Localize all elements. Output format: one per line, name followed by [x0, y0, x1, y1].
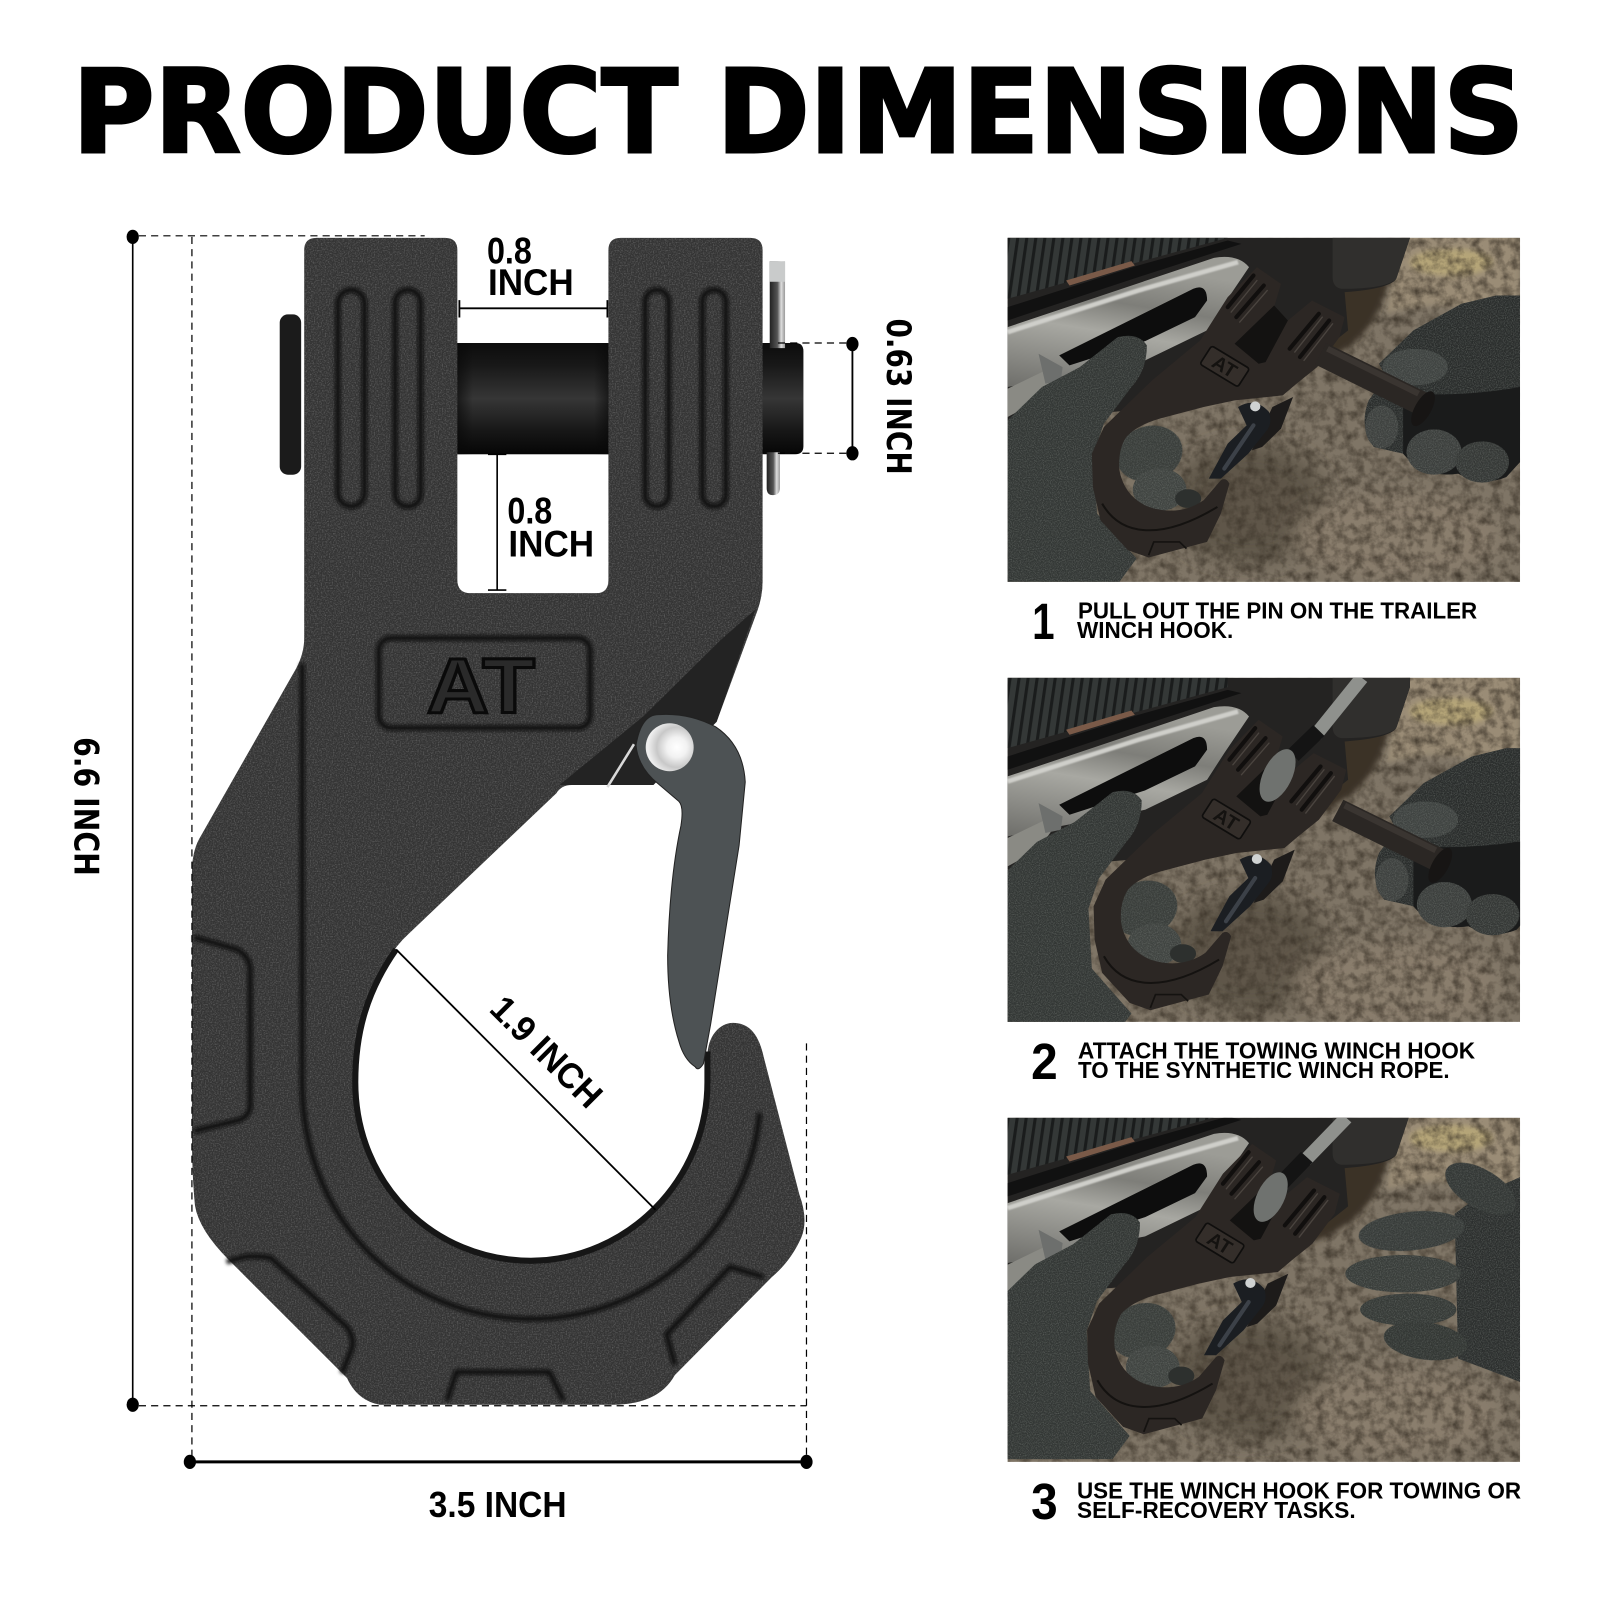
- dimension: slot width 0.8 inch: 0.8: [487, 230, 532, 271]
- dimension: overall height 6.6 inch: [67, 230, 806, 1412]
- dimension: throat 1.9 inch: 1.9 INCH: [482, 988, 610, 1116]
- embossed ridges and recesses: [194, 290, 764, 1401]
- hook body: [192, 238, 805, 1405]
- open right hand: [1345, 1152, 1525, 1382]
- hook product illustration: [192, 238, 805, 1405]
- latch pivot: [646, 723, 694, 771]
- dimension: width 3.5 inch: [184, 237, 813, 1525]
- latch: [636, 714, 745, 1069]
- step 1 caption: WINCH HOOK.: [1077, 617, 1233, 643]
- step 1 caption: [1077, 598, 1477, 643]
- opening inner rim: [355, 949, 707, 1261]
- dimension: slot depth 0.8 inch: 0.8: [507, 491, 552, 532]
- photo 2: attaching rope: [1008, 678, 1520, 1022]
- step 2 caption: [1078, 1038, 1475, 1083]
- dimension: overall height 6.6 inch: 6.6 INCH: [67, 737, 106, 876]
- step 2 caption: ATTACH THE TOWING WINCH HOOK: [1078, 1038, 1475, 1064]
- dimension: slot depth 0.8 inch: [488, 454, 594, 590]
- step 3 caption: SELF-RECOVERY TASKS.: [1077, 1497, 1356, 1523]
- cotter pin: [767, 261, 785, 495]
- lower shaded wedge: [559, 609, 755, 785]
- step 3 number: 3: [1031, 1473, 1058, 1530]
- dimension: slot width 0.8 inch: [459, 230, 607, 317]
- dimension: width 3.5 inch: 3.5 INCH: [429, 1485, 567, 1525]
- brand plate AT: AT: [427, 644, 535, 730]
- dimension: pin diameter 0.63 inch: [778, 319, 918, 475]
- step 2 caption: TO THE SYNTHETIC WINCH ROPE.: [1078, 1057, 1450, 1083]
- dimension: slot width 0.8 inch: INCH: [488, 262, 574, 303]
- photo 3: using the hook: [1008, 1118, 1520, 1462]
- spring wire: [607, 744, 634, 787]
- step 1 number: 1: [1032, 593, 1055, 650]
- cross pin: [449, 343, 803, 454]
- title: PRODUCT DIMENSIONS: [72, 46, 1524, 180]
- dimension: slot depth 0.8 inch: INCH: [508, 523, 594, 564]
- dimension: throat 1.9 inch: [396, 949, 655, 1210]
- step 1 caption: PULL OUT THE PIN ON THE TRAILER: [1078, 598, 1477, 624]
- pin head left: [280, 314, 301, 475]
- step 3 caption: [1077, 1478, 1521, 1523]
- step 2 number: 2: [1031, 1033, 1058, 1090]
- photo 1: pulling out the pin: [1008, 238, 1520, 582]
- step 3 caption: USE THE WINCH HOOK FOR TOWING OR: [1077, 1478, 1521, 1504]
- dimension: pin diameter 0.63 inch: 0.63 INCH: [879, 319, 918, 475]
